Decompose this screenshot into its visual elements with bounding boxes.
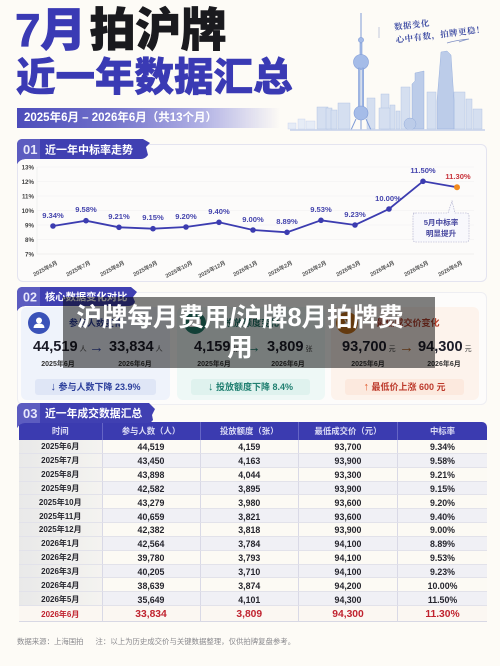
card: quota <box>177 307 325 400</box>
line chart: winning rate: 2026年2月 <box>301 259 328 278</box>
table: monthly summary: 9.53% <box>430 553 455 563</box>
table: monthly summary: 9.34% <box>430 442 455 452</box>
line chart: winning rate: 9.58% <box>75 205 97 214</box>
pill: quota change: ↓ 投放额度下降 8.4% <box>208 381 293 393</box>
table: monthly summary: 43,450 <box>138 456 164 466</box>
table: monthly summary <box>19 422 487 622</box>
table: monthly summary: 40,659 <box>138 512 164 522</box>
icon: quota <box>184 314 206 334</box>
panel: trend chart <box>17 144 487 282</box>
table: monthly summary: 4,163 <box>238 456 260 466</box>
table: monthly summary: 10.00% <box>428 581 457 591</box>
overlay caption text: 用 <box>227 334 253 362</box>
table: monthly summary: 4,101 <box>238 595 260 605</box>
figures: quota June 2026: 3,809 张 <box>267 339 312 355</box>
icon: price: ¥ <box>344 318 351 330</box>
line chart: winning rate: 2026年1月 <box>232 259 259 278</box>
icon: price <box>336 312 358 334</box>
handwritten note: 心中有数，拍牌更稳！ <box>395 23 486 46</box>
table: monthly summary: 投放额度（张） <box>220 426 279 436</box>
title: 7月拍沪牌: 7月拍沪牌 <box>15 4 226 56</box>
date: 2026年6月 <box>271 361 305 368</box>
table: monthly summary: 42,382 <box>138 525 164 535</box>
line chart: winning rate: 11.30% <box>445 172 471 181</box>
table: monthly summary: 中标率 <box>430 426 455 436</box>
figures: participants June 2026: 33,834 人 <box>109 339 163 355</box>
line chart: winning rate: 9% <box>25 222 34 230</box>
line chart: winning rate: 2025年10月 <box>164 259 194 280</box>
table: monthly summary: 2025年9月 <box>41 484 79 493</box>
overlay caption banner <box>63 297 435 368</box>
line chart: winning rate: 11% <box>22 194 34 200</box>
line chart: winning rate: 9.21% <box>108 212 130 221</box>
line chart: winning rate: 9.53% <box>310 205 332 214</box>
line chart: winning rate: 2025年6月 <box>32 259 59 278</box>
table: monthly summary: 43,279 <box>138 498 164 508</box>
card title: participants: 参与人数变化 <box>69 318 123 328</box>
line chart: winning rate: 9.20% <box>175 212 197 221</box>
line chart: winning rate: 2025年9月 <box>132 259 159 278</box>
table: monthly summary: 33,834 <box>135 609 167 620</box>
line chart: winning rate: 10.00% <box>375 194 401 203</box>
heading: 02 core data: 02 <box>23 290 37 304</box>
table: monthly summary: 94,100 <box>335 539 361 549</box>
table: monthly summary: 9.58% <box>430 456 455 466</box>
card: lowest price <box>331 307 479 400</box>
table: monthly summary: 93,600 <box>335 512 361 522</box>
figures: participants: 44,519 人 <box>33 339 87 355</box>
table: monthly summary: 11.50% <box>428 595 457 605</box>
table: monthly summary: 3,793 <box>238 553 260 563</box>
icon: people <box>28 312 50 334</box>
heading: 03 summary <box>17 403 155 428</box>
panel: core data comparison <box>17 292 487 405</box>
table: monthly summary: 44,519 <box>138 442 164 452</box>
line chart: winning rate: 8.89% <box>276 217 298 226</box>
date: 2025年6月 <box>351 361 385 368</box>
table: monthly summary: 35,649 <box>138 595 164 605</box>
line chart: winning rate: 13% <box>22 164 34 172</box>
table: monthly summary: 8.89% <box>430 539 455 549</box>
arrow: participants: → <box>89 339 104 356</box>
line chart: winning rate: 2026年2月 <box>267 259 294 278</box>
overlay caption text: 沪牌每月费用/沪牌8月拍牌费 <box>76 304 404 332</box>
line chart: winning rate: 5月中标率 <box>424 217 459 227</box>
line chart: winning rate: 2025年8月 <box>99 259 126 278</box>
line chart: winning rate: 2026年4月 <box>369 259 396 278</box>
date: 2026年6月 <box>118 361 152 368</box>
table: monthly summary: 38,639 <box>138 581 164 591</box>
date range banner: 2025年6月 – 2026年6月（共13个月） <box>24 112 217 124</box>
date: 2025年6月 <box>41 361 75 368</box>
table: monthly summary: 11.30% <box>425 609 460 620</box>
pill: participants change: ↓ 参与人数下降 23.9% <box>50 381 141 393</box>
subtitle: 近一年数据汇总: 近一年数据汇总 <box>16 56 292 100</box>
table: monthly summary: 2026年6月 <box>41 610 79 619</box>
pill: participants change <box>35 379 156 395</box>
table: monthly summary: 93,900 <box>335 484 361 494</box>
line chart: winning rate: 11.50% <box>410 166 436 175</box>
date range banner <box>17 108 280 128</box>
table: monthly summary: 4,044 <box>238 470 260 480</box>
line chart: winning rate: 8% <box>25 237 34 244</box>
table: monthly summary: 9.20% <box>430 498 455 508</box>
table: monthly summary: 3,809 <box>236 609 262 620</box>
heading: 03 summary: 近一年成交数据汇总 <box>45 405 142 421</box>
table: monthly summary: 2026年1月 <box>41 539 79 548</box>
heading: 02 core data: 核心数据变化对比 <box>45 288 127 304</box>
table: monthly summary: 94,100 <box>335 567 361 577</box>
table: monthly summary: 参与人数（人） <box>122 426 180 436</box>
table: monthly summary: 2026年2月 <box>41 553 79 562</box>
table: monthly summary: 3,821 <box>238 512 260 522</box>
card title: price: 最低成交价变化 <box>376 318 440 328</box>
date: 2026年6月 <box>427 361 461 368</box>
table: monthly summary: 时间 <box>52 426 69 436</box>
table: monthly summary: 9.23% <box>430 567 455 577</box>
table: monthly summary: 2026年5月 <box>41 595 79 604</box>
line chart: winning rate: 9.15% <box>142 213 164 222</box>
table: monthly summary: 3,784 <box>238 539 260 549</box>
table: monthly summary: 94,300 <box>332 609 364 620</box>
table: monthly summary: 39,780 <box>138 553 164 563</box>
table: monthly summary: 2025年11月 <box>39 512 81 521</box>
figures: price: 93,700 元 <box>342 339 396 355</box>
date: 2025年6月 <box>197 361 231 368</box>
table: monthly summary: 94,100 <box>335 553 361 563</box>
line chart: winning rate: 9.00% <box>242 215 264 224</box>
table: monthly summary: 2025年10月 <box>39 498 82 507</box>
table: monthly summary: 93,900 <box>335 525 361 535</box>
table: monthly summary: 94,300 <box>335 595 361 605</box>
line chart: winning rate: 9.34% <box>42 211 64 220</box>
line chart: winning rate: 12% <box>22 179 34 186</box>
table: monthly summary: 93,600 <box>335 498 361 508</box>
handwritten note: 数据变化 <box>393 17 431 33</box>
table: monthly summary: 2025年7月 <box>41 456 79 465</box>
table: monthly summary: 93,900 <box>335 456 361 466</box>
heading: 02 core data <box>17 287 137 311</box>
table: monthly summary: 2025年8月 <box>41 470 79 479</box>
table: monthly summary: 40,205 <box>138 567 164 577</box>
table: monthly summary: 3,710 <box>238 567 260 577</box>
line chart: winning rate: 2025年12月 <box>197 259 227 280</box>
line chart: winning rate: 2026年3月 <box>335 259 362 278</box>
table: monthly summary: 4,159 <box>238 442 260 452</box>
arrow: quota: → <box>246 339 261 356</box>
footer: source note: 数据来源：上海国拍 注：以上为历史成交价与关键数据整理，仅供拍牌复盘参考。 <box>17 637 295 646</box>
illustration: Shanghai skyline <box>288 13 485 131</box>
table: monthly summary: 94,200 <box>335 581 361 591</box>
table: monthly summary: 9.40% <box>430 512 455 522</box>
table: monthly summary: 43,898 <box>138 470 164 480</box>
figures: price June 2026: 94,300 元 <box>418 339 472 355</box>
line chart: winning rate: 7% <box>25 252 34 258</box>
heading: 01 trend <box>17 139 150 164</box>
table: monthly summary: 93,700 <box>335 442 361 452</box>
line chart: winning rate <box>22 164 474 280</box>
card: participants <box>21 307 170 400</box>
table: monthly summary: 3,818 <box>238 525 260 535</box>
table: monthly summary: 最低成交价（元） <box>314 426 382 436</box>
pill: quota change <box>191 379 310 395</box>
line chart: winning rate: 9.23% <box>344 210 366 219</box>
table: monthly summary: 3,980 <box>238 498 260 508</box>
arrow: price: → <box>399 339 414 356</box>
line chart: winning rate: 9.40% <box>208 207 230 216</box>
pill: price change: ↑ 最低价上涨 600 元 <box>363 381 446 393</box>
table: monthly summary: 42,582 <box>138 484 164 494</box>
pill: price change <box>345 379 464 395</box>
heading: 03 summary: 03 <box>23 406 37 421</box>
card title: quota: 投放额度变化 <box>225 318 279 328</box>
table: monthly summary: 42,564 <box>138 539 164 549</box>
table: monthly summary: 9.21% <box>430 470 455 480</box>
table: monthly summary: 2025年6月 <box>41 442 79 451</box>
overlay caption text <box>76 304 404 362</box>
table: monthly summary: 3,874 <box>238 581 260 591</box>
line chart: winning rate: 明显提升 <box>426 228 457 238</box>
table: monthly summary: 2026年4月 <box>41 581 79 590</box>
line chart: winning rate: 10% <box>22 208 34 215</box>
table: monthly summary: 2025年12月 <box>39 525 82 534</box>
table: monthly summary: 3,895 <box>238 484 260 494</box>
line chart: winning rate: 2026年5月 <box>403 259 430 278</box>
heading: 01 trend: 01 <box>23 142 37 157</box>
table: monthly summary: 93,300 <box>335 470 361 480</box>
table: monthly summary: 9.15% <box>430 484 455 494</box>
table: monthly summary: 9.00% <box>430 525 455 535</box>
line chart: winning rate: 2026年6月 <box>437 259 464 278</box>
heading: 01 trend: 近一年中标率走势 <box>45 142 133 158</box>
line chart: winning rate: 2025年7月 <box>65 259 92 278</box>
table: monthly summary: 2026年3月 <box>41 567 79 576</box>
figures: quota: 4,159 张 <box>194 339 239 355</box>
